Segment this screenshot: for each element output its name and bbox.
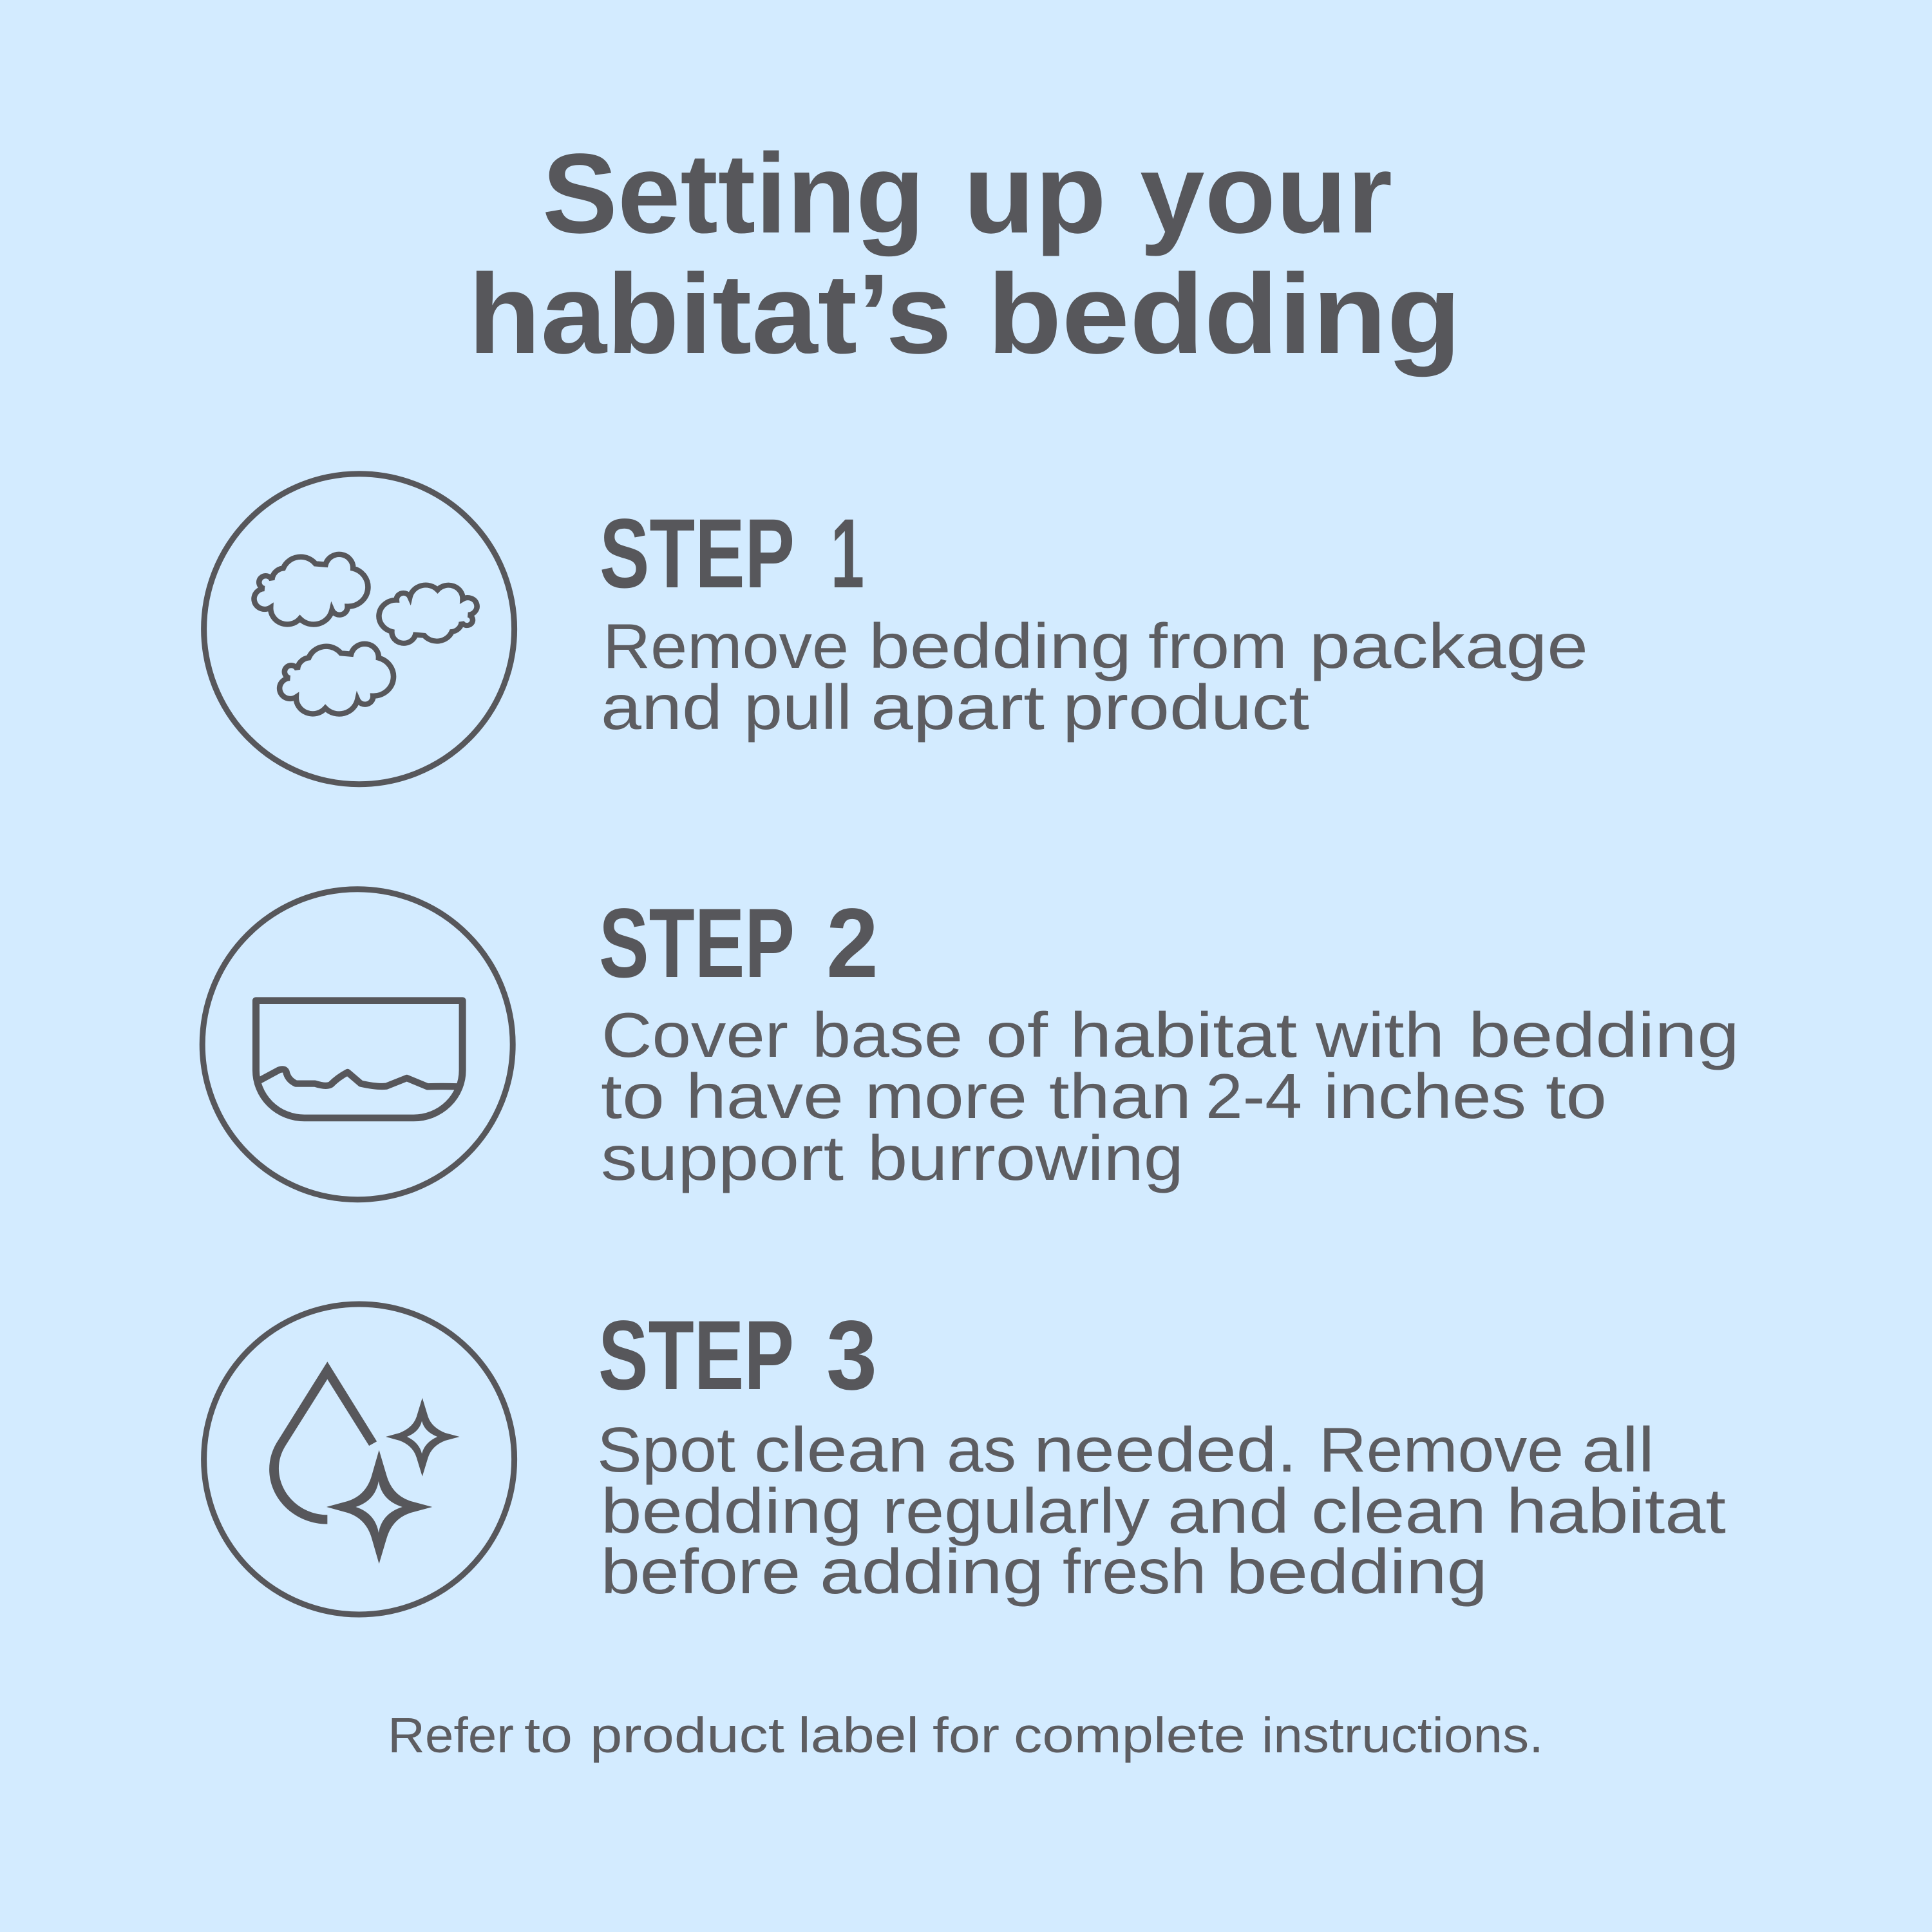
footer note: Refer: [388, 1708, 514, 1763]
step 2 description: inches: [1323, 1061, 1526, 1132]
step 1 heading: STEP: [600, 498, 795, 609]
step 2 description: than: [1049, 1061, 1191, 1132]
step 2 description: to: [1546, 1061, 1607, 1132]
icon: water drop with sparkles in circle: [204, 1304, 515, 1615]
footer note: product: [590, 1708, 784, 1763]
step 3 description: as: [947, 1414, 1016, 1485]
step 3 description: before: [601, 1536, 800, 1607]
step 1 description: pull: [744, 672, 852, 743]
step 3 heading: STEP: [598, 1300, 794, 1410]
title: Setting: [542, 131, 925, 257]
step 3 description: adding: [820, 1536, 1044, 1607]
step 2 description: base: [812, 999, 963, 1070]
step 3 description: needed.: [1034, 1414, 1297, 1485]
step 3 description: clean: [754, 1414, 928, 1485]
footer note: for: [933, 1708, 999, 1763]
footer note: label: [798, 1708, 919, 1763]
footer note: instructions.: [1262, 1708, 1544, 1763]
footer note: complete: [1014, 1708, 1245, 1763]
step 3 description: fresh: [1063, 1536, 1206, 1607]
step 2 description: to: [601, 1061, 665, 1132]
icon: habitat tank with bedding layer in circle: [202, 889, 513, 1200]
step 2 description: have: [686, 1061, 844, 1132]
step 1 heading: 1: [831, 498, 864, 609]
icon: fluffy bedding clouds in circle: [204, 474, 515, 784]
step 3 description: bedding: [601, 1475, 862, 1546]
step 2 description: with: [1315, 999, 1444, 1070]
step 2 description: bedding: [1468, 999, 1739, 1070]
step 3 description: regularly: [882, 1475, 1150, 1546]
panel: step 3: [204, 1300, 1726, 1615]
step 1 description: and: [601, 672, 723, 743]
step 1 description: [601, 611, 1588, 743]
step 2 description: support: [601, 1122, 844, 1193]
step 1 description: apart: [871, 672, 1045, 743]
step 1 description: bedding: [869, 611, 1132, 681]
title: bedding: [987, 251, 1461, 377]
step 1 description: product: [1063, 672, 1309, 743]
step 2 description: 2-4: [1206, 1061, 1302, 1132]
title: [468, 131, 1461, 377]
step 3 description: all: [1582, 1414, 1654, 1485]
step 1 description: package: [1309, 611, 1588, 681]
step 3 description: clean: [1311, 1475, 1486, 1546]
step 3 description: Remove: [1319, 1414, 1564, 1485]
step 3 description: habitat: [1506, 1475, 1726, 1546]
step 2 description: habitat: [1070, 999, 1297, 1070]
step 3 description: and: [1168, 1475, 1289, 1546]
panel: step 1: [204, 474, 1588, 784]
step 2 description: burrowing: [867, 1122, 1184, 1193]
step 3 description: [597, 1414, 1726, 1607]
step 1 description: from: [1148, 611, 1287, 681]
step 2 description: Cover: [601, 999, 788, 1070]
step 3 description: Spot: [597, 1414, 735, 1485]
title: up: [963, 131, 1106, 257]
step 3 description: bedding: [1226, 1536, 1488, 1607]
footer note: to: [524, 1708, 573, 1763]
step 1 description: Remove: [603, 611, 849, 681]
step 2 description: more: [865, 1061, 1027, 1132]
step 2 description: of: [986, 999, 1048, 1070]
step 2 description: [601, 999, 1739, 1193]
panel: step 2: [202, 888, 1739, 1200]
step 2 heading: STEP: [599, 888, 795, 998]
title: habitat’s: [468, 251, 952, 377]
title: your: [1140, 131, 1392, 257]
step 3 heading: 3: [826, 1300, 877, 1410]
footer note: [388, 1708, 1544, 1763]
step 2 heading: 2: [826, 888, 878, 998]
